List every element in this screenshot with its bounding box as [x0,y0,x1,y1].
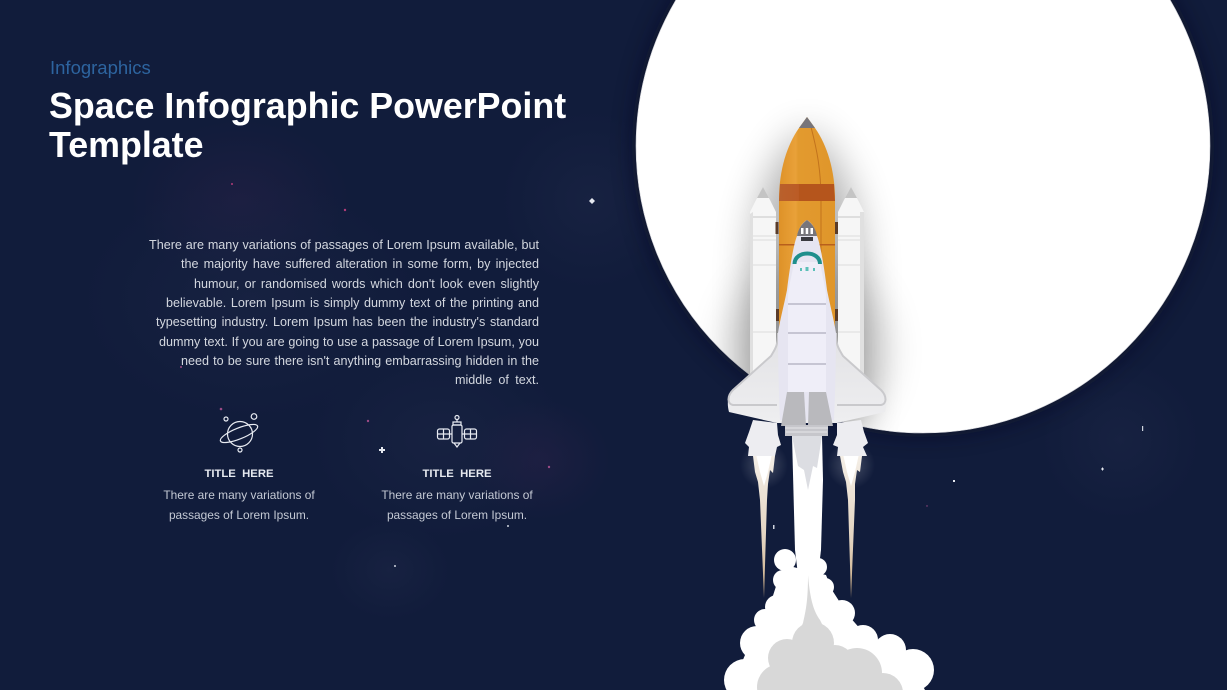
feature: satellite [381,414,533,522]
title: Template [49,125,204,165]
body text: believable. Lorem Ipsum is simply dummy text of the printing and [166,296,539,310]
orbiter [728,220,886,426]
feature text [163,488,315,522]
icon: satellite [436,414,478,448]
stars [180,183,1143,567]
moon [636,0,1210,433]
feature heading: TITLE HERE [204,468,274,480]
right booster [835,187,864,400]
background nebula [80,110,1200,620]
moon shadow [632,0,1214,437]
subtitle: Infographics [50,57,151,78]
feature heading: TITLE HERE [422,468,492,480]
smoke cloud [724,549,934,690]
body text: dummy text. If you are going to use a passage of Lorem Ipsum, you [159,335,539,349]
engine nozzles [785,425,828,436]
rocket [728,117,886,456]
white smoke [724,549,934,690]
fuselage [778,220,836,420]
body text: typesetting industry. Lorem Ipsum has been the industry's standard [156,315,539,329]
title [49,86,566,165]
title: Space Infographic PowerPoint [49,86,566,126]
left booster [750,187,778,400]
grey inner smoke [757,575,903,690]
booster nozzles [745,420,868,456]
body text [149,238,539,387]
icon: planet [220,413,258,453]
rocket glow shadow [729,130,885,440]
feature: planet [163,413,315,522]
external tank [776,117,838,350]
booster flames [740,441,875,598]
feature text: There are many variations of [381,488,533,502]
feature text: passages of Lorem Ipsum. [169,508,309,522]
body text: There are many variations of passages of Lorem Ipsum available, but [149,238,539,252]
main exhaust [792,436,823,575]
body text: middle of text. [455,373,539,387]
body text: need to be sure there isn't anything embarrassing hidden in the [181,354,539,368]
body text: humour, or randomised words which don't look even slightly [194,277,539,291]
feature text [381,488,533,522]
feature text: passages of Lorem Ipsum. [387,508,527,522]
body text: the majority have suffered alteration in some form, by injected [181,257,539,271]
wings [728,333,886,423]
feature text: There are many variations of [163,488,315,502]
